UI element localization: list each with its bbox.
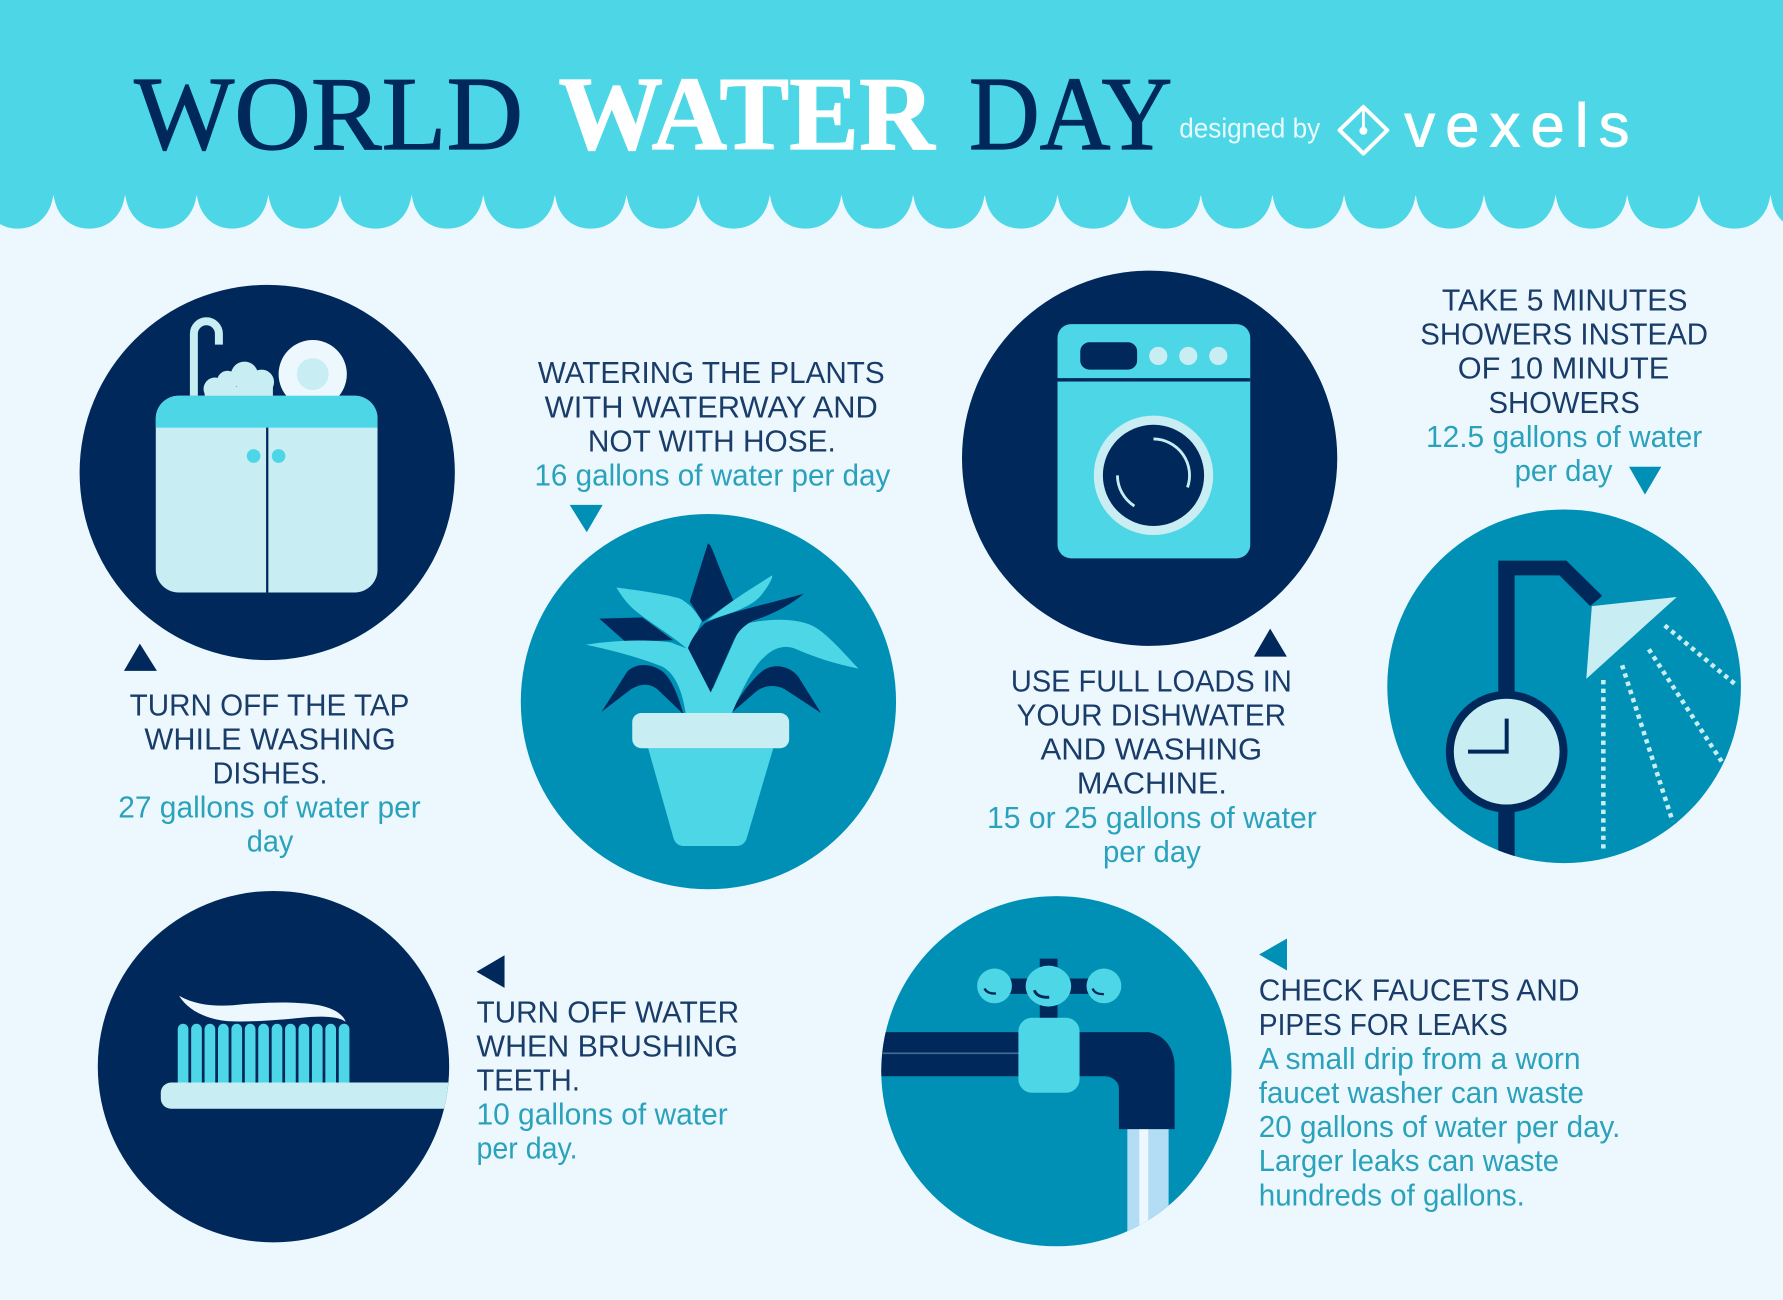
text: brushing: TURN OFF WATER bbox=[476, 996, 739, 1029]
text: full loads bbox=[987, 665, 1317, 869]
text: full loads: YOUR DISHWATER bbox=[1017, 700, 1286, 733]
text: showers: TAKE 5 MINUTES bbox=[1442, 284, 1687, 317]
text: leaks: Larger leaks can waste bbox=[1259, 1145, 1559, 1178]
text: tap: TURN OFF THE TAP bbox=[130, 689, 409, 722]
text: tap bbox=[118, 689, 421, 859]
panel: faucet bbox=[876, 896, 1231, 1251]
text: brushing: WHEN BRUSHING bbox=[476, 1030, 738, 1063]
text: showers: SHOWERS bbox=[1488, 387, 1640, 420]
text: leaks: PIPES FOR LEAKS bbox=[1259, 1009, 1508, 1042]
text: leaks bbox=[1259, 975, 1620, 1212]
arrow: toothbrush bbox=[476, 955, 505, 988]
text: tap: 27 gallons of water per bbox=[118, 792, 421, 825]
text: brushing bbox=[476, 996, 739, 1166]
text: showers bbox=[1420, 284, 1708, 488]
panel: toothbrush bbox=[98, 891, 450, 1242]
title: WORLD bbox=[134, 56, 523, 172]
text: leaks: faucet washer can waste bbox=[1259, 1077, 1584, 1110]
text: full loads: per day bbox=[1103, 836, 1201, 869]
text: brushing: TEETH. bbox=[476, 1065, 580, 1098]
text: leaks: hundreds of gallons. bbox=[1259, 1179, 1525, 1212]
text: showers: 12.5 gallons of water bbox=[1426, 421, 1702, 454]
title: DAY bbox=[969, 56, 1172, 172]
title: WATER bbox=[558, 56, 936, 172]
text: full loads: MACHINE. bbox=[1077, 768, 1227, 801]
text: showers: per day bbox=[1515, 455, 1612, 488]
panel: shower bbox=[1387, 509, 1741, 876]
text: full loads: USE FULL LOADS IN bbox=[1011, 665, 1292, 698]
text: plants: NOT WITH HOSE. bbox=[588, 425, 836, 458]
text: plants: WITH WATERWAY AND bbox=[545, 391, 878, 424]
text: showers: SHOWERS INSTEAD bbox=[1420, 319, 1708, 352]
arrow: plants bbox=[570, 505, 603, 532]
text: full loads: AND WASHING bbox=[1040, 734, 1262, 767]
text: tap: WHILE WASHING bbox=[144, 723, 396, 756]
text: full loads: 15 or 25 gallons of water bbox=[987, 802, 1317, 835]
text: tap: day bbox=[247, 826, 293, 859]
vexels credit bbox=[1179, 92, 1629, 161]
text: leaks: 20 gallons of water per day. bbox=[1259, 1111, 1620, 1144]
text: brushing: 10 gallons of water bbox=[476, 1099, 728, 1132]
vexels credit: vexels bbox=[1404, 92, 1629, 161]
text: tap: DISHES. bbox=[213, 757, 327, 790]
text: plants: WATERING THE PLANTS bbox=[538, 357, 885, 390]
text: plants bbox=[534, 357, 890, 493]
header band with scalloped edge bbox=[0, 0, 1783, 229]
arrow: faucet bbox=[1259, 938, 1287, 971]
panel: sink bbox=[80, 285, 455, 660]
arrow: washing machine bbox=[1254, 629, 1287, 657]
text: brushing: per day. bbox=[476, 1133, 578, 1166]
text: leaks: A small drip from a worn bbox=[1259, 1043, 1581, 1076]
title bbox=[134, 56, 1172, 172]
text: showers: OF 10 MINUTE bbox=[1458, 353, 1669, 386]
vexels credit: designed by bbox=[1179, 113, 1321, 144]
text: leaks: CHECK FAUCETS AND bbox=[1259, 975, 1579, 1008]
text: plants: 16 gallons of water per day bbox=[534, 460, 890, 493]
arrow: sink bbox=[124, 644, 157, 671]
panel: plant bbox=[521, 514, 896, 889]
arrow: shower bbox=[1629, 467, 1661, 495]
panel: washing machine bbox=[962, 271, 1337, 646]
